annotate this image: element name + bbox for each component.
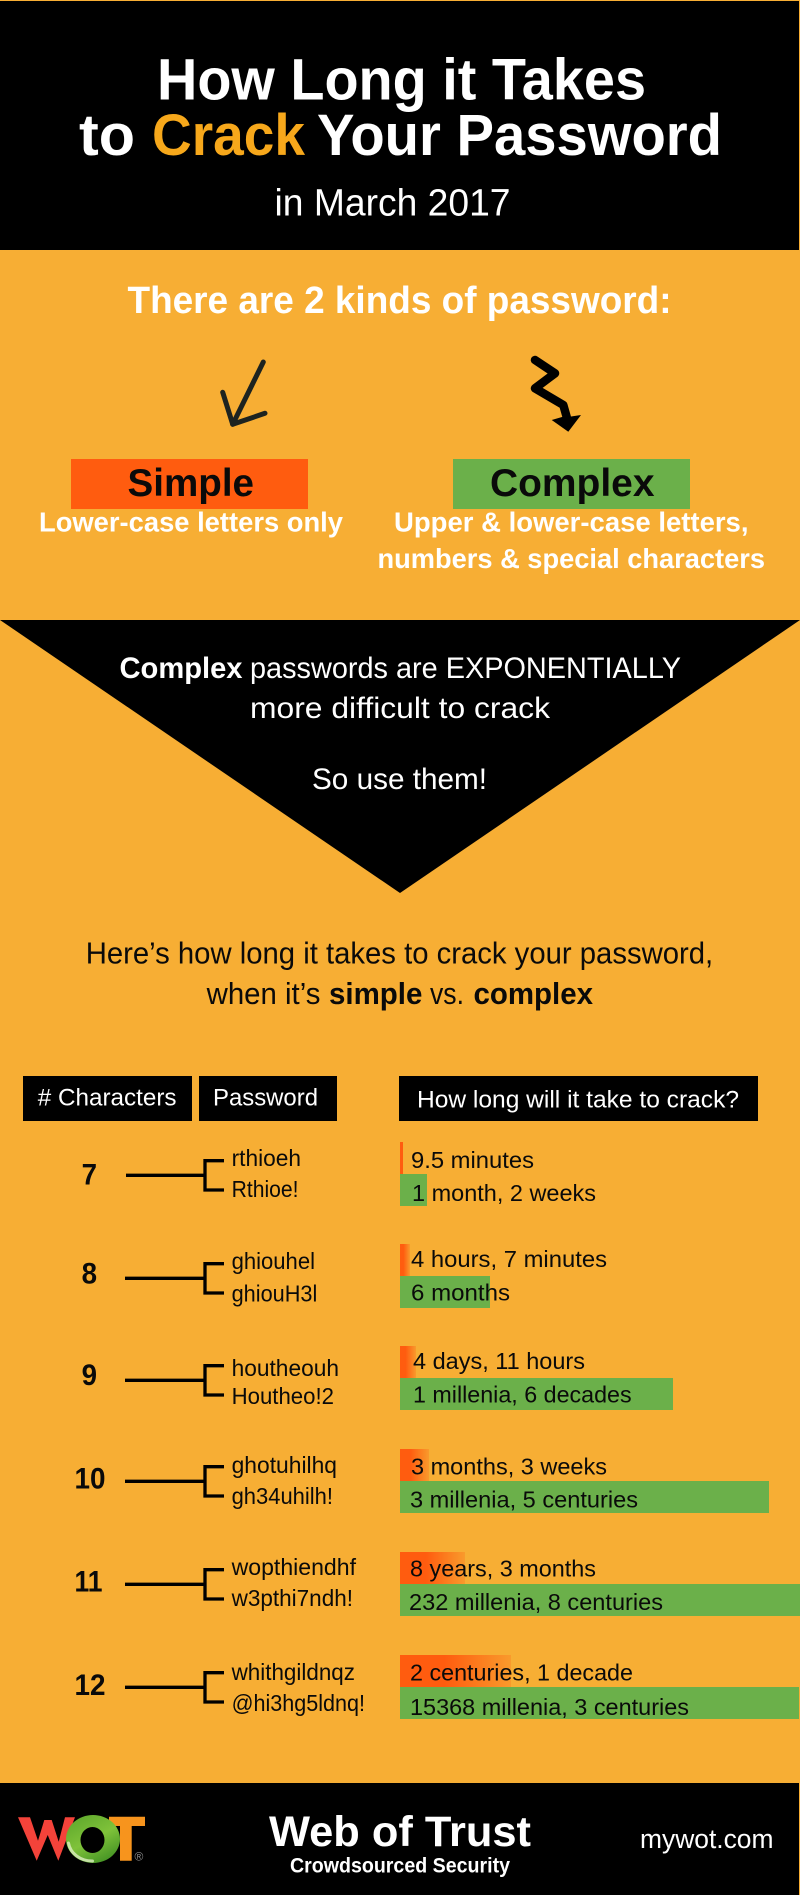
- row: 9 characters: 9: [82, 1359, 97, 1392]
- row: 12 characters: whithgildnqz: [231, 1659, 355, 1685]
- intro text: vs.: [430, 976, 464, 1011]
- row: 9 characters: [82, 1346, 673, 1410]
- footer brand: Web of Trust: [269, 1808, 531, 1856]
- row: 10 characters: 3 millenia, 5 centuries: [410, 1487, 638, 1513]
- panel: simple: [39, 459, 343, 538]
- intro text: complex: [474, 976, 594, 1011]
- row: 9 characters: Houtheo!2: [232, 1383, 334, 1409]
- subtitle: in March 2017: [274, 182, 510, 224]
- icon: zigzag arrow: [535, 360, 581, 432]
- callout: triangle: passwords are EXPONENTIALLY: [250, 652, 681, 685]
- row: 7 characters: 7: [82, 1158, 97, 1191]
- row: 7 characters: 9.5 minutes: [411, 1147, 534, 1173]
- row: 10 characters: 10: [74, 1462, 106, 1495]
- row: 8 characters: ghiouhel: [232, 1248, 315, 1274]
- panel: simple: Simple: [128, 462, 254, 505]
- callout: triangle: more difficult to crack: [250, 692, 551, 725]
- icon: thin arrow: [223, 362, 265, 424]
- table header: password: Password: [213, 1084, 318, 1111]
- row: 12 characters: 12: [74, 1669, 106, 1702]
- heading: two kinds: There are 2 kinds of password:: [128, 280, 672, 322]
- row: 11 characters: 8 years, 3 months: [410, 1556, 596, 1582]
- title line 2: [79, 103, 722, 168]
- row: 10 characters: gh34uhilh!: [232, 1483, 333, 1509]
- row: 9 characters: houtheouh: [232, 1355, 339, 1381]
- intro text: simple: [329, 976, 422, 1011]
- row: 7 characters: [82, 1142, 596, 1206]
- title line 2: to: [79, 103, 135, 168]
- table header: how long: How long will it take to crack?: [417, 1087, 739, 1114]
- intro text: when it’s: [206, 976, 320, 1011]
- table header: password: [199, 1076, 337, 1121]
- row: 7 characters: 1 month, 2 weeks: [412, 1180, 596, 1206]
- icon: WOT logo: ®: [134, 1850, 144, 1864]
- row: 8 characters: 8: [82, 1257, 97, 1290]
- row: 8 characters: 6 months: [411, 1280, 510, 1306]
- intro text: Here’s how long it takes to crack your password,: [86, 935, 713, 970]
- row: 11 characters: w3pthi7ndh!: [231, 1585, 353, 1611]
- row: 12 characters: 15368 millenia, 3 centuries: [410, 1694, 689, 1720]
- footer url: mywot.com: [640, 1824, 774, 1854]
- complex description: Upper & lower-case letters,: [394, 506, 748, 538]
- row: 7 characters: rthioeh: [232, 1145, 301, 1171]
- row: 11 characters: 232 millenia, 8 centuries: [409, 1589, 663, 1615]
- panel: complex: Complex: [490, 462, 655, 505]
- row: 9 characters: 4 days, 11 hours: [413, 1348, 585, 1374]
- icon: WOT logo: [18, 1815, 145, 1864]
- row: 11 characters: 11: [74, 1566, 102, 1599]
- complex description: numbers & special characters: [378, 543, 765, 574]
- footer tagline: Crowdsourced Security: [290, 1854, 510, 1877]
- complex description: [378, 506, 765, 574]
- title line 2: Crack: [152, 103, 306, 168]
- row: 8 characters: ghiouH3l: [232, 1281, 317, 1307]
- row: 10 characters: [74, 1449, 769, 1513]
- header banner: [0, 1, 799, 250]
- panel: complex: [378, 459, 765, 574]
- intro text: [86, 935, 713, 1011]
- footer banner: [0, 1783, 799, 1895]
- table header: how long: [399, 1076, 758, 1121]
- table header: characters: [23, 1076, 192, 1121]
- row: 9 characters: 1 millenia, 6 decades: [413, 1382, 632, 1408]
- row: 12 characters: [74, 1655, 799, 1720]
- simple description: Lower-case letters only: [39, 506, 343, 538]
- row: 10 characters: ghotuhilhq: [232, 1452, 337, 1478]
- row: 12 characters: 2 centuries, 1 decade: [410, 1660, 633, 1686]
- callout: triangle: Complex: [120, 652, 243, 685]
- title line 2: Your Password: [317, 103, 722, 168]
- row: 11 characters: [74, 1552, 800, 1616]
- callout: triangle: [0, 620, 800, 893]
- row: 10 characters: 3 months, 3 weeks: [411, 1454, 607, 1480]
- callout: triangle: So use them!: [312, 763, 487, 796]
- table header: characters: # Characters: [38, 1084, 176, 1111]
- row: 7 characters: Rthioe!: [232, 1176, 298, 1202]
- row: 8 characters: 4 hours, 7 minutes: [411, 1246, 607, 1272]
- title line 1: How Long it Takes: [157, 48, 646, 112]
- row: 8 characters: [82, 1244, 607, 1308]
- row: 12 characters: @hi3hg5ldnq!: [232, 1690, 365, 1716]
- row: 11 characters: wopthiendhf: [231, 1554, 357, 1580]
